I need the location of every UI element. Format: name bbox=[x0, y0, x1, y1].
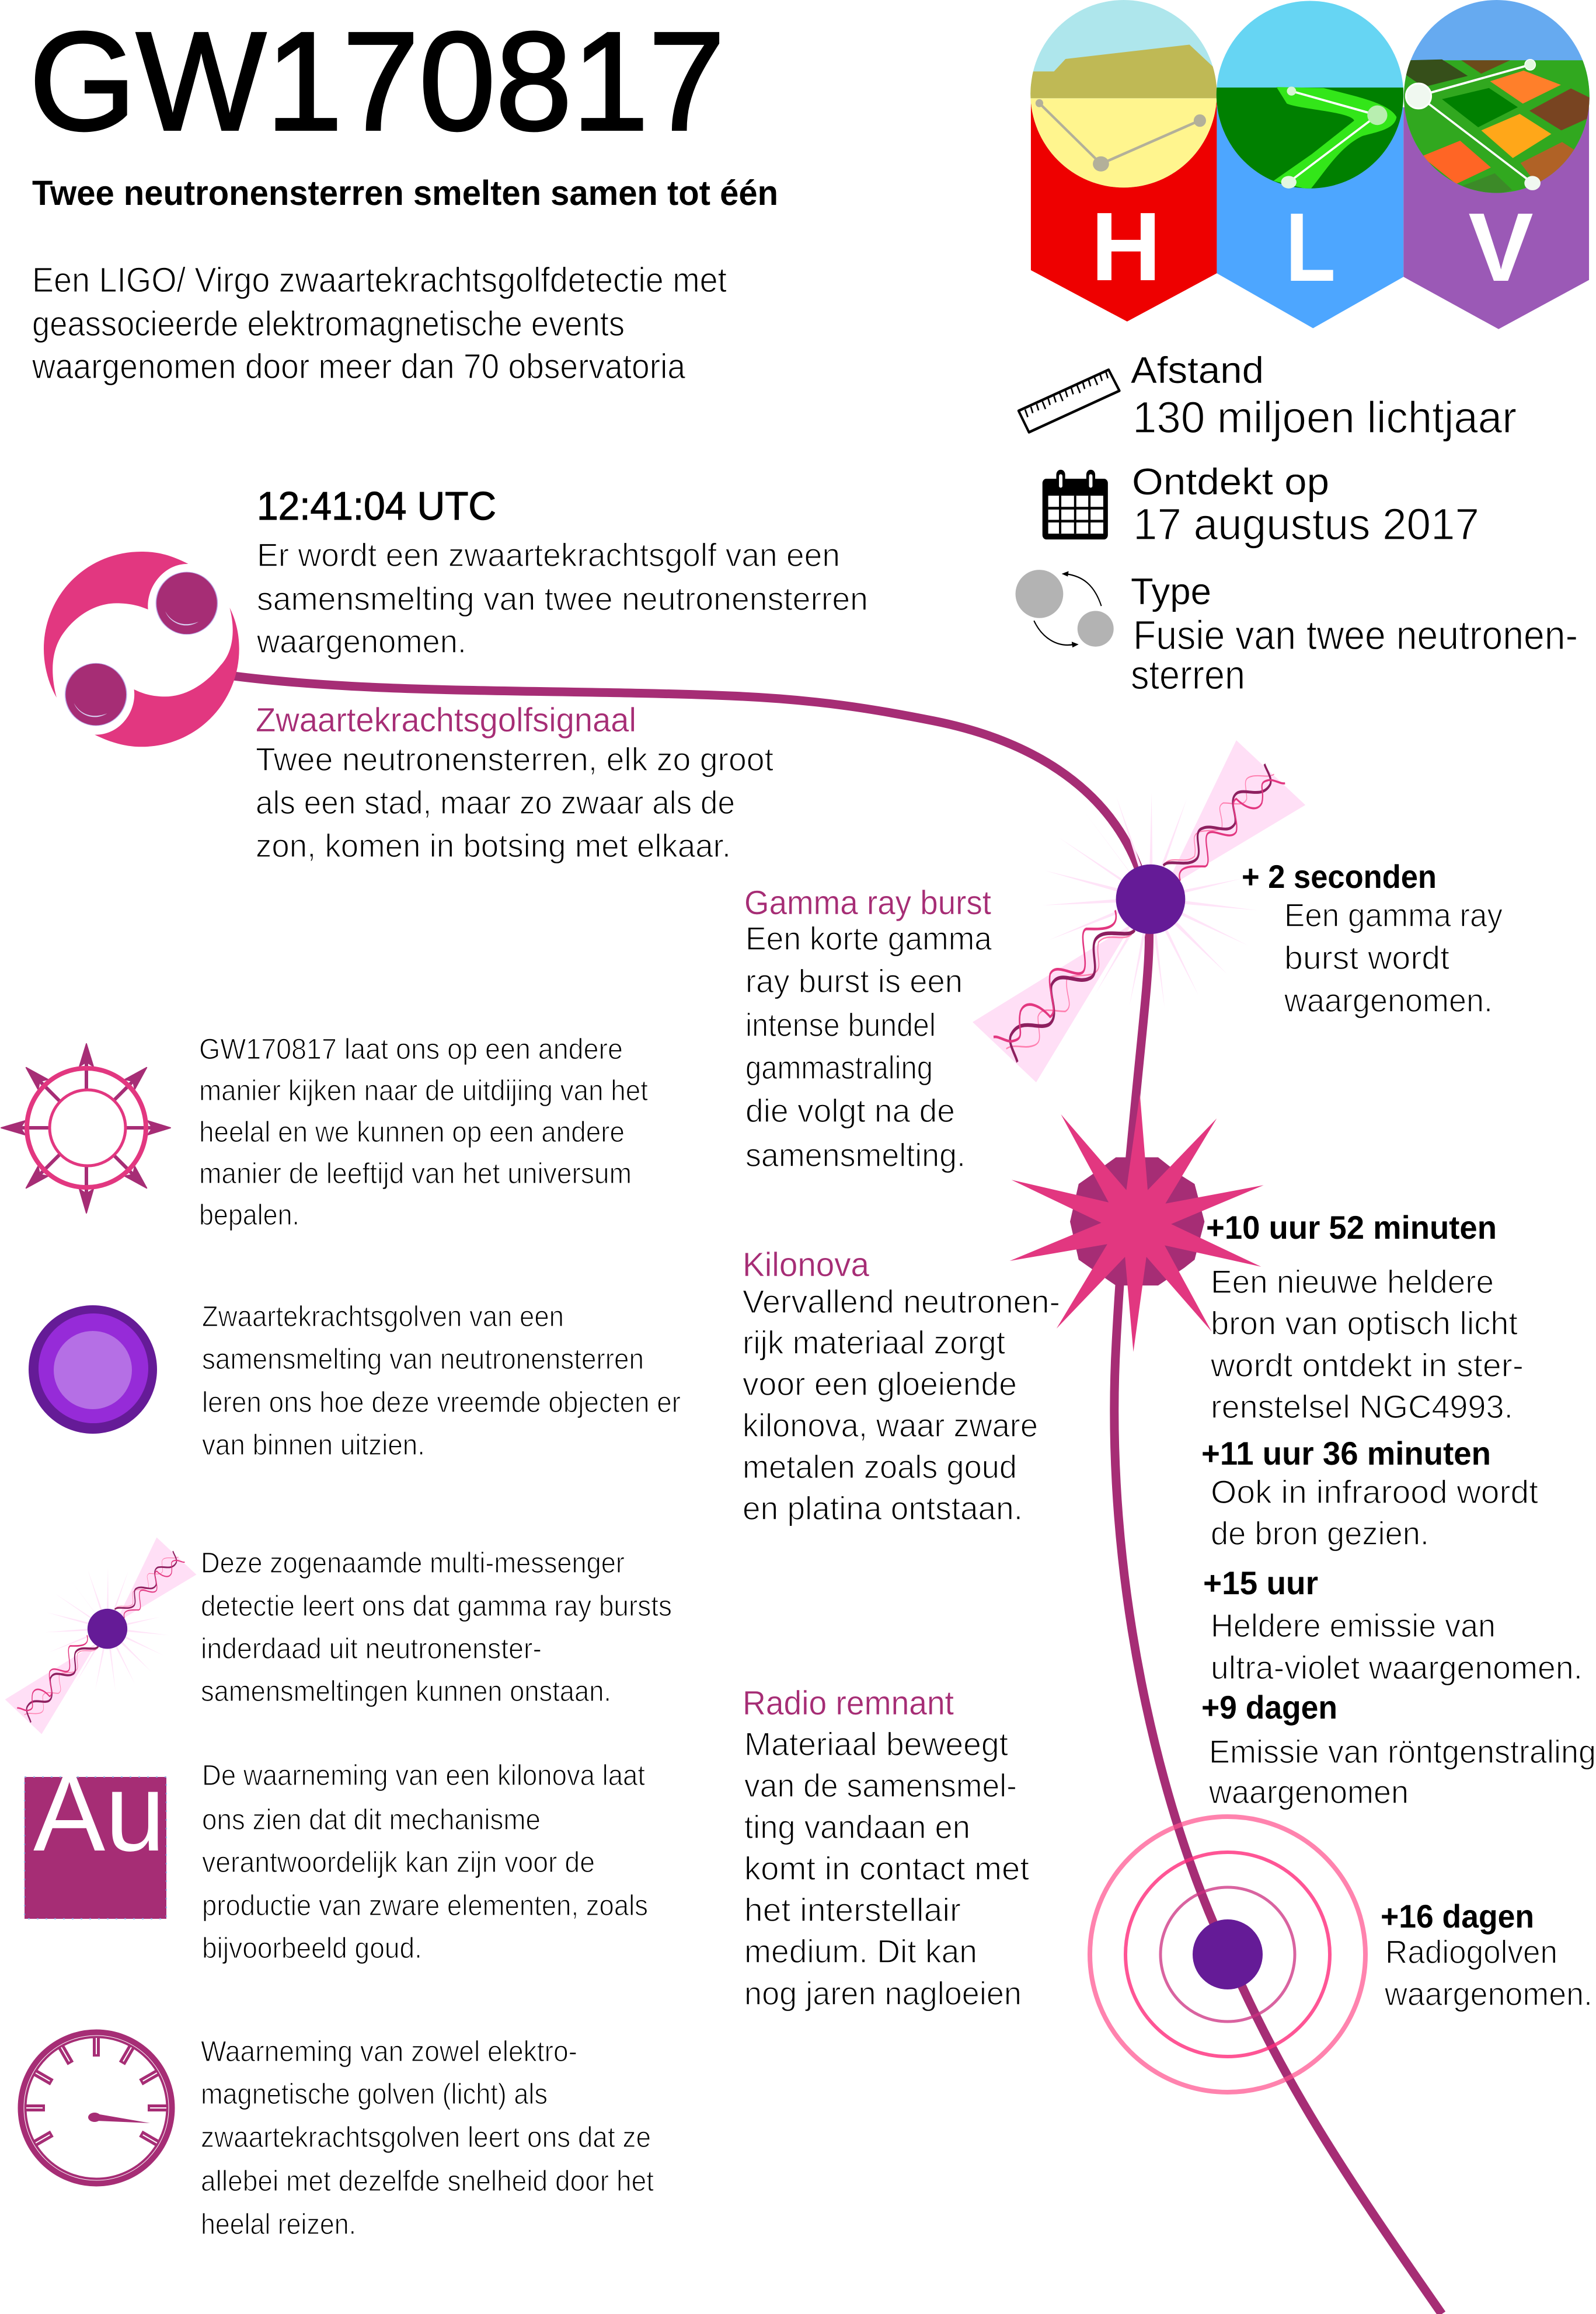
text block: gamma ray burst: die volgt na de bbox=[745, 1092, 955, 1129]
text block: +15 uur: ultra-violet waargenomen. bbox=[1211, 1649, 1583, 1686]
jet cones bbox=[973, 740, 1305, 1082]
text block: kilonova: en platina ontstaan. bbox=[743, 1490, 1023, 1527]
remnant node bbox=[1116, 865, 1185, 934]
text block: ontdekt op: 17 augustus 2017 bbox=[1133, 500, 1479, 549]
text block: 12:41:04 UTC: waargenomen. bbox=[256, 623, 466, 660]
text block: neutron star interior: Zwaartekrachtsgolven van een bbox=[202, 1300, 564, 1333]
icon: small gamma ray burst bbox=[5, 1538, 196, 1734]
letter L: L bbox=[1285, 193, 1336, 302]
text block: +10 uur 52 minuten: bron van optisch licht bbox=[1211, 1305, 1518, 1341]
text block: +9 dagen: +9 dagen bbox=[1201, 1689, 1337, 1726]
text block: radio remnant: komt in contact met bbox=[744, 1850, 1029, 1887]
text block: multi-messenger: samensmeltingen kunnen onstaan. bbox=[201, 1675, 611, 1707]
text block: radio remnant: van de samensmel- bbox=[744, 1767, 1017, 1804]
text block: kilonova: rijk materiaal zorgt bbox=[743, 1324, 1005, 1361]
text block: gamma ray burst: Een korte gamma bbox=[745, 920, 992, 957]
icon: binary neutron stars bbox=[44, 552, 239, 747]
icon: binary merger type bbox=[1016, 570, 1114, 647]
star 2 bbox=[65, 663, 127, 726]
icon: speedometer bbox=[22, 2034, 170, 2182]
text block: gamma ray burst: ray burst is een bbox=[745, 963, 963, 999]
text block: radio remnant: het interstellair bbox=[744, 1891, 961, 1928]
icon: calendar bbox=[1043, 470, 1108, 539]
swirl lower bbox=[95, 608, 239, 747]
badge: Virgo bbox=[1400, 0, 1593, 329]
icon: expanding universe bbox=[1, 1044, 170, 1213]
text block: +16 dagen: +16 dagen bbox=[1381, 1898, 1534, 1935]
text block: 12:41:04 UTC bbox=[256, 484, 868, 660]
text block: speed of gravity bbox=[201, 2035, 654, 2240]
text block: heavy elements bbox=[202, 1759, 648, 1964]
text block: +11 uur 36 minuten: Ook in infrarood wordt bbox=[1211, 1473, 1538, 1510]
title: GW170817 bbox=[29, 3, 725, 159]
text block: +2 seconden: + 2 seconden bbox=[1242, 858, 1437, 895]
text block: gamma ray burst: intense bundel bbox=[745, 1006, 936, 1043]
intro text: geassocieerde elektromagnetische events bbox=[32, 304, 625, 343]
waves lower bbox=[994, 910, 1135, 1062]
text block: +10 uur 52 minuten: Een nieuwe heldere bbox=[1211, 1263, 1494, 1300]
subtitle: Twee neutronensterren smelten samen tot één bbox=[32, 173, 778, 212]
rays bbox=[1042, 793, 1257, 1008]
text block: afstand bbox=[1131, 349, 1517, 442]
text block: multi-messenger bbox=[201, 1546, 672, 1707]
text block: kilonova: metalen zoals goud bbox=[743, 1448, 1017, 1485]
text block: neutron star interior: van binnen uitzien. bbox=[202, 1428, 425, 1461]
text block: +15 uur bbox=[1203, 1564, 1583, 1686]
text block: speed of gravity: zwaartekrachtsgolven leert ons dat ze bbox=[201, 2121, 651, 2153]
text block: speed of gravity: heelal reizen. bbox=[201, 2208, 356, 2240]
text block: gamma ray burst bbox=[744, 884, 992, 1173]
kilonova graphic bbox=[1009, 1094, 1264, 1352]
text block: ontdekt op bbox=[1132, 461, 1479, 549]
text block: +10 uur 52 minuten: renstelsel NGC4993. bbox=[1211, 1388, 1513, 1425]
text block: +2 seconden: burst wordt bbox=[1284, 939, 1449, 976]
text block: radio remnant: nog jaren nagloeien bbox=[744, 1975, 1022, 2012]
text block: afstand: Afstand bbox=[1131, 349, 1264, 391]
text block: +2 seconden bbox=[1242, 858, 1503, 1019]
text block: gamma ray burst: Gamma ray burst bbox=[744, 884, 991, 922]
text block: multi-messenger: inderdaad uit neutronenster- bbox=[201, 1632, 542, 1665]
text block: kilonova: Kilonova bbox=[743, 1246, 870, 1284]
text block: +9 dagen: waargenomen bbox=[1208, 1773, 1409, 1810]
text block: radio remnant: Materiaal beweegt bbox=[744, 1726, 1008, 1762]
radio remnant rings bbox=[1090, 1817, 1365, 2092]
text block: gamma ray burst: samensmelting. bbox=[745, 1137, 966, 1173]
text block: +10 uur 52 minuten bbox=[1206, 1209, 1524, 1425]
intro text bbox=[32, 260, 727, 386]
text block: +11 uur 36 minuten: de bron gezien. bbox=[1211, 1515, 1429, 1552]
text block: 12:41:04 UTC: samensmelting van twee neutronensterren bbox=[257, 580, 868, 617]
text block: speed of gravity: magnetische golven (licht) als bbox=[201, 2078, 548, 2110]
text block: +16 dagen bbox=[1381, 1898, 1592, 2012]
timeline curve bbox=[234, 676, 1442, 2314]
text block: zwaartekrachtsgolfsignaal: als een stad, maar zo zwaar als de bbox=[256, 784, 735, 821]
text block: type: sterren bbox=[1131, 652, 1245, 698]
text block: +16 dagen: waargenomen. bbox=[1384, 1975, 1592, 2012]
text block: heavy elements: productie van zware elementen, zoals bbox=[202, 1889, 648, 1922]
text block: zwaartekrachtsgolfsignaal: Zwaartekrachtsgolfsignaal bbox=[256, 701, 636, 739]
swirl upper bbox=[44, 552, 188, 698]
text block: heavy elements: De waarneming van een kilonova laat bbox=[202, 1759, 645, 1792]
text block: speed of gravity: Waarneming van zowel elektro- bbox=[201, 2035, 577, 2068]
text block: expansion: GW170817 laat ons op een andere bbox=[199, 1033, 623, 1065]
text block: +15 uur: +15 uur bbox=[1203, 1564, 1318, 1601]
text block: expansion: manier kijken naar de uitdijing van het bbox=[199, 1074, 648, 1107]
text block: multi-messenger: detectie leert ons dat gamma ray bursts bbox=[201, 1590, 672, 1622]
text block: expansion bbox=[199, 1033, 648, 1231]
icon: gold element bbox=[25, 1751, 166, 1919]
text block: afstand: 130 miljoen lichtjaar bbox=[1132, 393, 1517, 442]
badge: Hanford bbox=[1027, 0, 1219, 322]
text block: +9 dagen bbox=[1201, 1689, 1596, 1810]
text block: neutron star interior bbox=[202, 1300, 681, 1461]
text block: +11 uur 36 minuten: +11 uur 36 minuten bbox=[1201, 1435, 1491, 1472]
text block: expansion: heelal en we kunnen op een andere bbox=[199, 1116, 625, 1148]
text block: +2 seconden: waargenomen. bbox=[1284, 982, 1493, 1019]
text block: zwaartekrachtsgolfsignaal: Twee neutronensterren, elk zo groot bbox=[256, 741, 773, 778]
text block: +2 seconden: Een gamma ray bbox=[1284, 897, 1503, 933]
icon: neutron star bbox=[29, 1305, 157, 1434]
text block: radio remnant: ting vandaan en bbox=[744, 1808, 970, 1845]
waves upper bbox=[1163, 764, 1285, 881]
text block: heavy elements: verantwoordelijk kan zijn voor de bbox=[202, 1846, 595, 1879]
text block: neutron star interior: leren ons hoe deze vreemde objecten er bbox=[202, 1386, 681, 1419]
gamma ray burst graphic bbox=[973, 740, 1305, 1082]
badge: Livingston bbox=[1214, 0, 1406, 328]
text block: radio remnant: Radio remnant bbox=[743, 1684, 954, 1722]
icon: ruler bbox=[1019, 370, 1120, 433]
text block: 12:41:04 UTC: Er wordt een zwaartekrachtsgolf van een bbox=[257, 536, 840, 573]
text block: type: Type bbox=[1131, 570, 1211, 612]
text block: zwaartekrachtsgolfsignaal: zon, komen in botsing met elkaar. bbox=[256, 827, 731, 864]
text block: gamma ray burst: gammastraling bbox=[745, 1049, 933, 1086]
text block: expansion: bepalen. bbox=[199, 1198, 299, 1231]
text block: expansion: manier de leeftijd van het universum bbox=[199, 1157, 632, 1190]
text block: +10 uur 52 minuten: wordt ontdekt in ster- bbox=[1210, 1347, 1524, 1383]
text block: multi-messenger: Deze zogenaamde multi-messenger bbox=[201, 1546, 625, 1579]
text block: 12:41:04 UTC: 12:41:04 UTC bbox=[257, 484, 496, 528]
intro text: Een LIGO/ Virgo zwaartekrachtsgolfdetectie met bbox=[32, 260, 727, 299]
star 1 bbox=[156, 572, 217, 635]
text block: type bbox=[1131, 570, 1578, 698]
text block: radio remnant bbox=[743, 1684, 1029, 2012]
text block: +16 dagen: Radiogolven bbox=[1385, 1933, 1557, 1970]
text block: kilonova: kilonova, waar zware bbox=[743, 1407, 1038, 1444]
text block: ontdekt op: Ontdekt op bbox=[1132, 461, 1329, 503]
text block: +15 uur: Heldere emissie van bbox=[1211, 1607, 1496, 1644]
text block: +10 uur 52 minuten: +10 uur 52 minuten bbox=[1206, 1209, 1497, 1246]
intro text: waargenomen door meer dan 70 observatoria bbox=[32, 347, 686, 386]
text block: speed of gravity: allebei met dezelfde snelheid door het bbox=[201, 2165, 654, 2197]
text block: heavy elements: bijvoorbeeld goud. bbox=[202, 1932, 422, 1964]
letter H: H bbox=[1091, 193, 1161, 301]
text block: neutron star interior: samensmelting van neutronensterren bbox=[202, 1343, 644, 1375]
text block: radio remnant: medium. Dit kan bbox=[744, 1933, 977, 1970]
text block: heavy elements: ons zien dat dit mechanisme bbox=[202, 1803, 541, 1836]
detector badges bbox=[1027, 0, 1593, 329]
text block: kilonova bbox=[743, 1246, 1060, 1527]
icon: gold element: Au bbox=[33, 1751, 165, 1874]
letter V: V bbox=[1468, 193, 1534, 302]
text block: kilonova: voor een gloeiende bbox=[743, 1365, 1017, 1402]
text block: zwaartekrachtsgolfsignaal bbox=[256, 701, 773, 864]
text block: +11 uur 36 minuten bbox=[1201, 1435, 1538, 1552]
text block: kilonova: Vervallend neutronen- bbox=[743, 1283, 1060, 1320]
